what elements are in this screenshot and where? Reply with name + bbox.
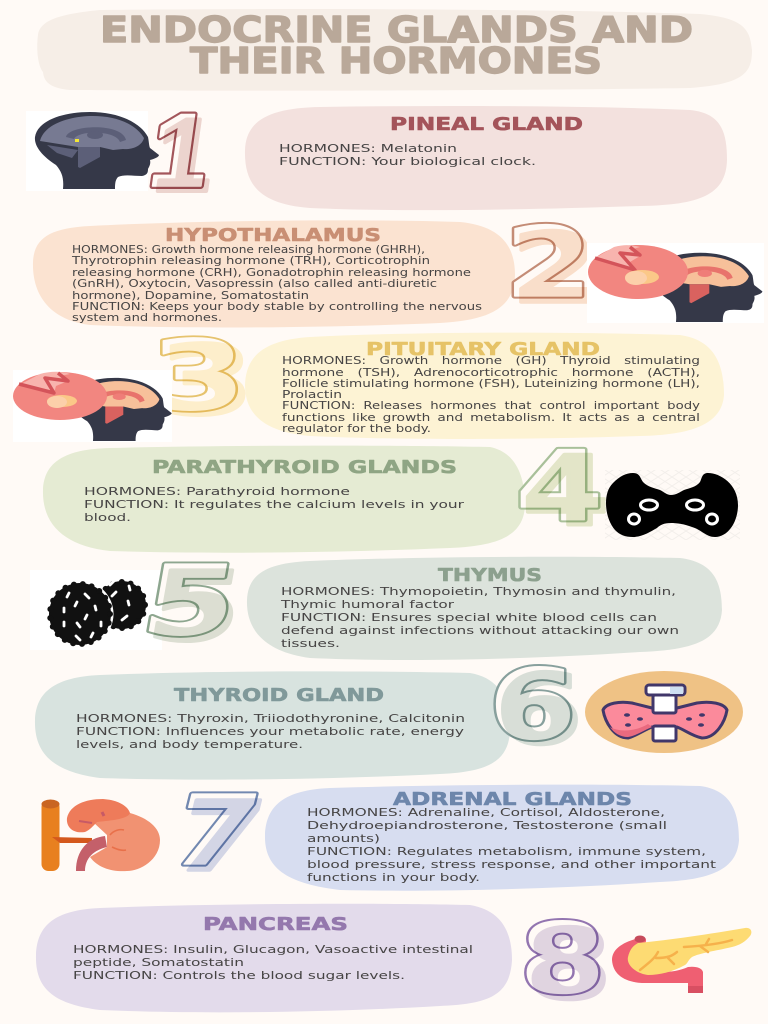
- number 6: 6: [489, 650, 576, 761]
- number 2: 2: [505, 208, 592, 319]
- number 3: 3: [150, 320, 246, 432]
- panel: thyroid gland: THYROID GLAND: [174, 686, 384, 706]
- title banner: [37, 9, 752, 91]
- section 3 icon: brain with pituitary highlighted: [13, 370, 172, 442]
- number 1: 1: [143, 92, 217, 209]
- panel: pituitary gland: [245, 333, 724, 439]
- panel: thymus: FUNCTION: Ensures special white blood cells can: [281, 612, 657, 624]
- panel: hypothalamus: hormone), Dopamine, Somatostatin: [72, 290, 309, 302]
- number 5: 5: [135, 546, 245, 657]
- panel: pituitary gland: PITUITARY GLAND: [366, 340, 600, 360]
- number 7: 7: [166, 781, 274, 893]
- number 7: 7: [161, 775, 269, 887]
- section 1 icon: brain with pineal gland: [26, 111, 159, 191]
- number 8: 8: [526, 909, 611, 1021]
- panel: pancreas: peptide, Somatostatin: [73, 957, 244, 969]
- panel: thymus: THYMUS: [438, 566, 542, 586]
- panel: pituitary gland: regulator for the body.: [282, 423, 431, 435]
- panel: adrenal glands: [265, 785, 739, 891]
- panel: thymus: Thymic humoral factor: [280, 599, 455, 611]
- panel: hypothalamus: Thyrotrophin releasing hormone (TRH), Corticotrophin: [71, 255, 430, 267]
- panel: parathyroid glands: [43, 446, 525, 553]
- number 3: 3: [159, 325, 254, 437]
- panel: adrenal glands: HORMONES: Adrenaline, Cortisol, Aldosterone,: [307, 807, 665, 819]
- panel: adrenal glands: functions in your body.: [307, 872, 480, 884]
- section 7 icon: kidney and adrenal gland: [42, 799, 160, 871]
- panel: hypothalamus: HORMONES: Growth hormone releasing hormone (GHRH),: [72, 244, 425, 256]
- section 8 icon: pancreas: [612, 928, 751, 993]
- panel: hypothalamus: HYPOTHALAMUS: [165, 226, 381, 246]
- number 1: 1: [148, 97, 222, 214]
- number 4: 4: [522, 437, 609, 548]
- number 4: 4: [516, 432, 603, 543]
- number 2: 2: [511, 214, 598, 325]
- panel: pancreas: HORMONES: Insulin, Glucagon, Vasoactive intestinal: [73, 944, 473, 956]
- title banner: ENDOCRINE GLANDS AND: [100, 10, 693, 51]
- panel: hypothalamus: FUNCTION: Keeps your body stable by controlling the nervous: [72, 301, 482, 313]
- panel: pituitary gland: HORMONES: Growth hormone (GH) Thyroid stimulating: [282, 355, 700, 367]
- panel: pineal gland: [245, 106, 727, 210]
- panel: parathyroid glands: FUNCTION: It regulates the calcium levels in your: [84, 499, 465, 511]
- number 4: 4: [516, 432, 603, 543]
- title banner: THEIR HORMONES: [190, 41, 602, 82]
- panel: thymus: tissues.: [281, 638, 340, 650]
- number 8: 8: [520, 903, 605, 1015]
- panel: pancreas: [36, 904, 512, 1012]
- number 6: 6: [489, 650, 576, 761]
- number 2: 2: [505, 208, 592, 319]
- panel: adrenal glands: FUNCTION: Regulates metabolism, immune system,: [307, 846, 706, 858]
- number 3: 3: [150, 320, 246, 432]
- panel: pituitary gland: Prolactin: [282, 389, 342, 401]
- panel: thyroid gland: levels, and body temperature.: [76, 739, 303, 751]
- panel: adrenal glands: amounts): [307, 833, 380, 845]
- panel: pituitary gland: functions like growth and metabolism. It acts as a central: [282, 412, 700, 424]
- panel: parathyroid glands: blood.: [84, 512, 131, 524]
- panel: pancreas: PANCREAS: [203, 915, 348, 935]
- number 7: 7: [161, 775, 269, 887]
- panel: pineal gland: PINEAL GLAND: [390, 115, 583, 135]
- panel: parathyroid glands: HORMONES: Parathyroid hormone: [84, 486, 350, 498]
- panel: pituitary gland: FUNCTION: Releases hormones that control important body: [282, 400, 700, 412]
- number 1: 1: [143, 92, 217, 209]
- number 6: 6: [495, 655, 582, 766]
- panel: adrenal glands: ADRENAL GLANDS: [393, 790, 632, 810]
- panel: pancreas: FUNCTION: Controls the blood sugar levels.: [73, 970, 405, 982]
- panel: adrenal glands: blood pressure, stress response, and other important: [307, 859, 716, 871]
- section 2 icon: brain with hypothalamus highlighted: [587, 243, 764, 323]
- panel: hypothalamus: (GnRH), Oxytocin, Vasopressin (also called anti-diuretic: [72, 278, 437, 290]
- section 5 icon: thymus: [30, 570, 162, 650]
- panel: thymus: HORMONES: Thymopoietin, Thymosin and thymulin,: [281, 586, 676, 598]
- panel: pituitary gland: hormone (TSH), Adrenocorticotrophic hormone (ACTH),: [282, 367, 700, 379]
- panel: thymus: defend against infections without attacking our own: [281, 625, 679, 637]
- section 4 icon: parathyroid glands: [605, 470, 740, 540]
- panel: pineal gland: HORMONES: Melatonin: [279, 143, 457, 155]
- section 6 icon: thyroid: [585, 671, 743, 753]
- number 5: 5: [141, 552, 251, 663]
- number 8: 8: [520, 903, 605, 1015]
- panel: thyroid gland: HORMONES: Thyroxin, Triiodothyronine, Calcitonin: [76, 713, 465, 725]
- number 5: 5: [135, 546, 245, 657]
- panel: thyroid gland: [35, 671, 510, 780]
- panel: pineal gland: FUNCTION: Your biological clock.: [279, 156, 536, 168]
- panel: thymus: [247, 557, 722, 660]
- panel: parathyroid glands: PARATHYROID GLANDS: [152, 458, 457, 478]
- panel: hypothalamus: releasing hormone (CRH), Gonadotrophin releasing hormone: [72, 267, 471, 279]
- panel: pituitary gland: Follicle stimulating hormone (FSH), Luteinizing hormone (LH),: [282, 378, 700, 390]
- panel: adrenal glands: Dehydroepiandrosterone, Testosterone (small: [307, 820, 667, 832]
- panel: hypothalamus: [33, 220, 515, 327]
- panel: hypothalamus: system and hormones.: [72, 312, 222, 324]
- panel: thyroid gland: FUNCTION: Influences your metabolic rate, energy: [76, 726, 464, 738]
